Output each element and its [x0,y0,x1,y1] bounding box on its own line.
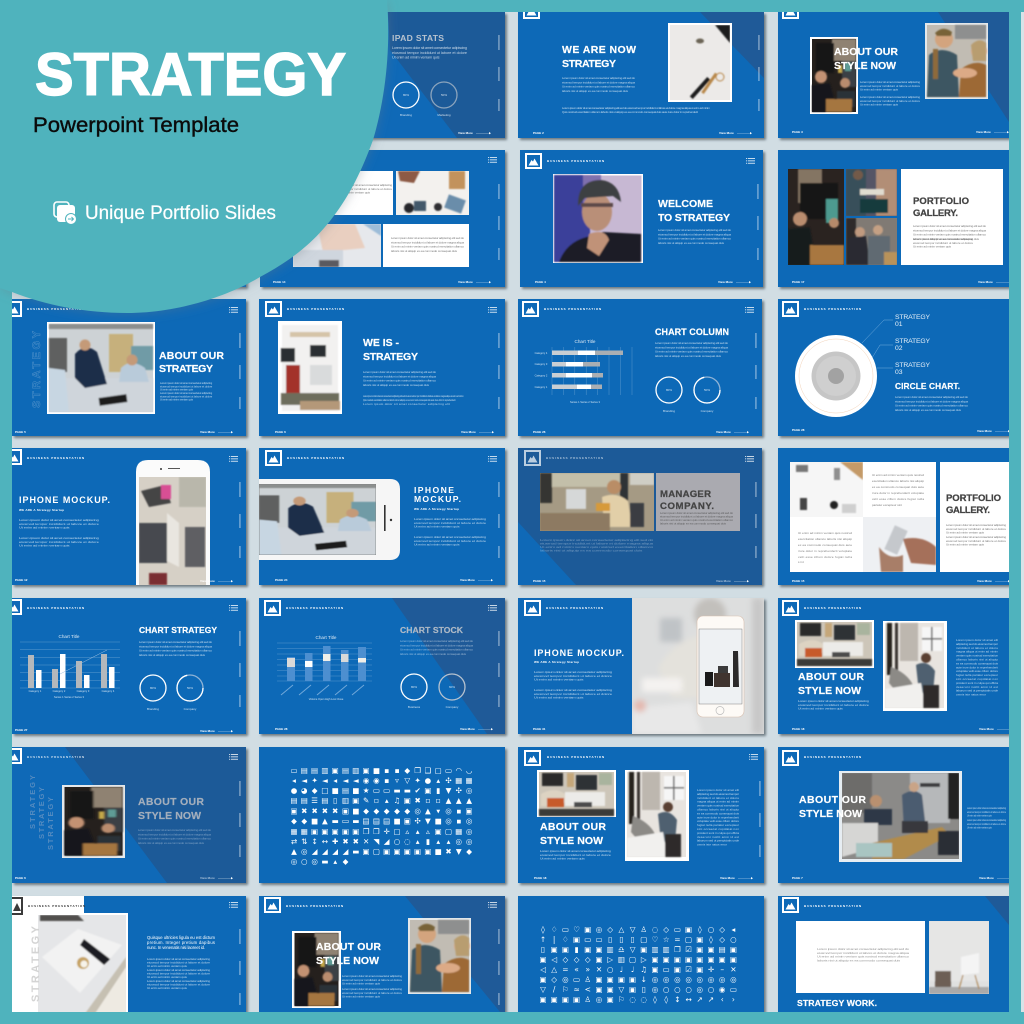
donut: stat two: 50% [441,93,447,97]
panel: portfolio gallery [901,169,1003,265]
photo: phones on table [790,462,863,517]
photo: presenter and team [839,771,962,862]
text card: Ut enim ad minim veniam quis nostrud [798,531,852,535]
icon grid: outline icons: ▽/⚐≈<▣▣▽▣▯◎○○○◎○◉▭ [540,985,737,994]
labels: strategy 01 to 03: STRATEGY [895,338,930,345]
heading: about our strategy: STRATEGY [159,363,213,375]
heading: about our style now [834,46,898,72]
text block: quote [147,935,216,950]
slide: welcome to strategy [520,150,763,287]
heading: about our style now [798,671,864,697]
heading: we are now strategy [562,44,636,70]
vertical words: strategy: STRATEGY [37,787,46,839]
icon grid: solid icons: ⇄⇅↕↔✚✖✖✕◥◢○◌▴▮▴▴◎◎ [291,837,472,846]
slide: chart column: View More [716,430,731,434]
heading: we are now strategy: WE ARE NOW [562,44,636,56]
slide: iPhone mockup, landscape: PAGE 24 [275,578,288,582]
labels: strategy 01 to 03 [895,314,930,376]
slide: chart stock: View More [460,727,475,731]
heading: we is strategy [363,337,418,363]
slide: welcome to strategy: BUSINESS PRESENTATION [547,159,605,163]
photo: two colleagues [925,23,988,99]
donut: stat one [656,377,682,413]
slide: welcome to strategy: View More [718,280,733,284]
tagline: Unique Portfolio Slides [85,202,276,224]
slide: portfolio gallery, photo grid: View More [978,280,993,284]
bar chart: Category 4 [102,689,115,693]
donut: stat one [140,675,166,711]
slide: about our style now, dark [6,747,246,883]
heading: chart strategy: CHART STRATEGY [139,625,217,635]
donut: stat one: Business [408,705,421,709]
slide: we is strategy [259,299,505,436]
labels: strategy 01 to 03: 03 [895,369,903,376]
heading: about our strategy: ABOUT OUR [159,350,224,362]
slide: portfolio gallery, photo grid [778,150,1011,287]
slide: about our style now, desk photos lower [518,747,764,883]
photo: desk with scissors [668,23,732,102]
heading: iPhone mockup [414,485,461,504]
text block [342,974,402,999]
slide: solid icon set [259,747,505,883]
heading: we is strategy: WE IS - [363,337,400,349]
bar chart: Chart Title [59,634,80,639]
panel: white text card [796,921,925,993]
icon grid: outline icons: ▯▣▣▮▣▣▥♎▽▣▥▥❐☑▣▣▤▣ [541,945,737,954]
text block: WE ARE A Strategy Startup [534,660,579,664]
panel: portfolio gallery [940,462,1009,572]
text block [138,828,211,845]
labels: strategy 01 to 03: 01 [895,321,903,328]
phone mockup [697,616,744,717]
donut: stat two: 50% [187,686,193,690]
text block: quote: Quisque ultricies ligula eu est dictum [147,935,216,940]
slide: about our style now, top right [778,4,1009,138]
photo: desk [537,770,616,817]
bar chart: Category 3 [77,689,90,693]
panel: portfolio gallery: GALLERY. [913,208,958,219]
slide: chart strategy [6,598,246,734]
icon grid: solid icons: ▣✖✖✖✖▣■◆◆◆◆◆◎▲▾◎▪▣ [290,806,473,816]
bar chart: Category 2 [535,374,548,378]
text block: quote: pretium. Integer pretium dapibus [147,940,215,945]
text card: ex ea commodo consequat duis aute [798,543,852,547]
heading: about our strategy [159,350,224,375]
icon grid: solid icons [290,766,473,866]
heading: about our style now: STYLE NOW [834,60,896,72]
slide: iPhone mockup, landscape [259,448,505,585]
icon grid: solid icons: ▭▤▤▥▣▤▥▣■▪▪◆❐❑▢▭◠◡ [290,766,472,775]
photo: man reading at desk [540,473,654,531]
slide: manager company: PAGE 15 [533,579,546,583]
text block [860,80,920,107]
heading: about our style now [316,941,381,967]
heading: about our style now: STYLE NOW [798,685,861,697]
panel: manager company: COMPANY. [660,501,714,512]
text column [956,638,998,697]
panel: manager company: MANAGER [660,489,711,500]
slide: circle chart: PAGE 28 [792,428,805,432]
donut: stat two: Company [184,707,197,711]
slide: chart strategy: PAGE 27 [15,728,28,732]
text card: Ut enim ad minim veniam quis nostrud [872,473,924,477]
heading: welcome to strategy [658,198,730,224]
slide: photo and text cards: PAGE 14 [273,280,286,284]
bar chart [535,339,632,404]
text block [160,381,213,402]
slide: about our style now, top right: PAGE 3 [792,130,803,134]
text column [697,788,740,847]
text card [383,224,469,267]
phone mockup [259,479,400,560]
slide: photo and text cards [260,150,505,287]
text block [895,395,968,412]
slide: circle chart [778,299,1010,436]
text block: quote: nunc. In venenatis nisi laoreet id. [147,945,205,950]
text block [540,539,654,552]
icon grid: outline icons [539,925,737,1004]
slide: chart column [518,299,762,436]
donut: stat two: 50% [704,388,710,392]
photo: woman by window [883,621,947,711]
slide: iPhone mockup, portrait: BUSINESS PRESENTATION [27,456,85,460]
heading: strategy work: STRATEGY WORK. [797,998,877,1008]
vertical word: strategy: STRATEGY [31,330,43,408]
text card: irure dolor in reprehenderit voluptate [798,549,852,553]
slide: outline icon set [518,896,764,1024]
photo: two colleagues [408,918,471,994]
slide: portfolio gallery, card grid: PAGE 15 [792,579,805,583]
icon: stacked slides [54,202,76,224]
text block: WE ARE A Strategy Startup [414,507,459,511]
photo: woman by window [625,770,689,861]
heading: about our style now: STYLE NOW [138,810,201,822]
donut: stat two [439,674,465,709]
slide: we is strategy: BUSINESS PRESENTATION [287,307,345,311]
donut: stat one: 80% [403,93,409,97]
heading: about our style now: ABOUT OUR [316,941,381,953]
slide: chart stock [259,598,505,734]
text card: pariatur excepteur sint [872,503,902,507]
slide: iPad stats: View More [458,131,473,135]
vertical words: strategy: STRATEGY [46,797,55,850]
subtitle: Powerpoint Template [33,113,239,137]
text card: velit esse cillum dolore fugiat nulla [872,497,924,501]
slide: manager company: View More [716,579,731,583]
slide: iPad stats [260,12,505,138]
badge: teal circle with title [0,0,388,313]
heading: about our style now: STYLE NOW [799,808,862,820]
slide: about our style now, team photo: BUSINESS PRESENTATION [804,755,862,759]
heading: about our style now [799,794,866,820]
text block [798,699,869,711]
slide: iPhone mockup, portrait: PAGE 12 [15,578,28,582]
donut: stat two: 60% [449,685,455,689]
slide: portfolio gallery, card grid: View More [977,579,992,583]
text card [863,462,936,517]
photo: chairs [929,921,989,994]
slide: chart strategy: View More [200,729,215,733]
slide: chart column: BUSINESS PRESENTATION [544,307,602,311]
text block [967,807,1006,830]
vertical word: strategy: STRATEGY [30,925,42,1002]
photo: portrait of a man [553,174,643,263]
heading: about our style now [138,796,204,822]
heading: circle chart: CIRCLE CHART. [895,381,960,391]
donut: stat one: Branding [400,113,412,117]
heading: chart column: CHART COLUMN [655,327,729,337]
donut: stat two [431,82,457,117]
text block [147,957,210,990]
slide: circle chart: BUSINESS PRESENTATION [804,307,862,311]
photo: office team [62,785,125,858]
bar chart: Series 1 Series 2 Series 3 [54,695,85,699]
icon grid: outline icons: ↑|♢▣▭▭▯▯▯▢♡☆=▢▣◊◇○ [540,935,737,944]
text block [534,660,612,699]
slide: about our strategy: BUSINESS PRESENTATION [27,307,85,311]
heading: about our style now: ABOUT OUR [798,671,864,683]
slide: about our style now, desk photos: View More [979,727,994,731]
text block: WE ARE A Strategy Startup [19,508,64,512]
title: STRATEGY [35,41,346,108]
bar chart: Category 1 [29,689,42,693]
panel: portfolio gallery: PORTFOLIO [946,493,1001,504]
photo: top view table [396,171,469,215]
panel: portfolio gallery: PORTFOLIO [913,196,969,207]
slide: white strategy panel with watch photo: BUSINESS PRESENTATION [28,904,86,908]
icon grid: solid icons: ◎○◎▬▴◆ [291,857,349,866]
slide: chart column: PAGE 26 [533,430,546,434]
icon grid: outline icons: ▣▣▣▣♙◎▣⚐◌◌◊◊↕↔↗↗‹› [539,995,735,1004]
slide: about our strategy [6,299,246,436]
panel: portfolio gallery: GALLERY. [946,505,990,516]
text card: irure dolor in reprehenderit voluptate [872,491,924,495]
slide: circle chart: View More [977,429,992,433]
donut: stat one: Branding [663,409,675,413]
heading: about our style now [540,821,606,847]
slide: about our style now, desk photos lower: BUSINESS PRESENTATION [547,755,605,759]
slide: we are now strategy [518,4,764,138]
stock chart: Volume Open High Low Close [309,697,344,701]
icon grid: solid icons: ▦▦▣▣▣▣▣❐❒✛▢▵▴▵▣▢▦◎ [290,827,472,836]
vertical words: strategy [28,775,55,850]
text block [363,370,464,406]
text block: iPad stats [392,46,467,60]
slide: we are now strategy: PAGE 2 [533,131,544,135]
bar chart: Category 4 [535,351,548,355]
heading: about our style now: ABOUT OUR [138,796,204,808]
text card: sint [798,560,804,564]
text card: exercitation ullamco laboris nisi aliquip [798,537,852,541]
slide: chart strategy: BUSINESS PRESENTATION [27,606,85,610]
bar chart: Category 3 [535,362,548,366]
photo grid [788,169,897,265]
slide: iPhone mockup, half photo: PAGE 31 [533,727,546,731]
donut: stat one: 80% [411,685,417,689]
heading: iPhone mockup: IPHONE MOCKUP. [19,495,110,505]
icon grid: solid icons: ◆◆■▲▬▭▬▤▤▤■▣✣▼■◎▪◎ [291,816,472,826]
slide: iPhone mockup, landscape: BUSINESS PRESENTATION [287,456,345,460]
slide: welcome to strategy: PAGE 4 [535,280,546,284]
icon grid: outline icons: ◊♢▭♡▣◎◇△▽♙◌◇▭▣◊○◇◂ [541,925,736,934]
bar chart [20,634,120,699]
heading: welcome to strategy: WELCOME [658,198,713,210]
photo: meeting [47,322,155,414]
slide: about our style now, team photo: View More [979,876,994,880]
slide: hidden behind badge [12,150,246,287]
phone mockup [136,460,210,585]
donut: stat one: Branding [147,707,159,711]
heading: chart stock: CHART STOCK [400,625,464,635]
donut: stat one [401,674,427,709]
slide: about our style now, bottom: BUSINESS PRESENTATION [286,904,344,908]
slide: about our style now, dark: BUSINESS PRESENTATION [27,755,85,759]
slide: about our style now, bottom [259,896,505,1024]
photo: laptop desk [293,224,381,267]
heading: about our style now: ABOUT OUR [834,46,898,58]
slide: about our style now, team photo: PAGE 7 [792,876,803,880]
donut: stat two [177,675,203,711]
slide: white strategy panel with watch photo [5,896,246,1024]
text card: exercitation ullamco laboris nisi aliquip [872,479,924,483]
slide: about our style now, desk photos: BUSINESS PRESENTATION [804,606,862,610]
slide: iPhone mockup, half photo: BUSINESS PRESENTATION [546,606,604,610]
donut: stat two: Marketing [437,113,451,117]
slide: strategy work [778,896,1009,1024]
slide: portfolio gallery, photo grid: PAGE 17 [792,280,805,284]
slide: about our style now, dark: PAGE 6 [15,876,26,880]
donut: stat two: Company [446,705,459,709]
stock chart [277,635,372,701]
photo: office team [292,931,341,1008]
text card: velit esse cillum dolore fugiat nulla [798,555,852,559]
panel: manager company [656,473,740,531]
bar chart: Series 1 Series 2 Series 3 [570,400,601,404]
slide: about our strategy: PAGE 5 [15,430,26,434]
icon grid: solid icons: ▲◎◢◢◢◢▬▣▢▣▣▣▣▣■✖▼◆ [291,847,472,856]
slide: we are now strategy: View More [719,131,734,135]
slide: photo and text cards: View More [458,280,473,284]
icon grid: solid icons: ▤▤☰▤▯▥▣✎▫▴♫▣✖▫▫▲▲▲ [290,796,472,805]
slide: iPhone mockup, portrait: View More [200,579,215,583]
donut: stat one: 80% [150,686,156,690]
text block [658,228,731,245]
heading: about our style now: STYLE NOW [316,955,379,967]
slide: about our style now, top right: View More [976,130,991,134]
slide: iPhone mockup, half photo [518,598,764,734]
slide: chart stock: PAGE 28 [275,727,288,731]
labels: strategy 01 to 03: STRATEGY [895,362,930,369]
slide: about our style now, desk photos lower: View More [720,876,735,880]
heading: about our style now: STYLE NOW [540,835,603,847]
donut: stat two: Company [701,409,714,413]
text block [139,640,212,657]
text card [320,171,393,215]
text block [19,508,99,547]
text card [790,517,863,572]
photo: hand holding phone [863,517,936,572]
slide: we is strategy: View More [461,430,476,434]
heading: about our style now: ABOUT OUR [799,794,866,806]
vertical words: strategy: STRATEGY [28,775,37,829]
icon grid: outline icons: ▣◁◇◇◇▣▷▥▢▷▣▣▣▣▣▣▣▣ [539,955,737,964]
icon grid: outline icons: ▣◇◎▭♙▣▣▣▣↓◎◎◎◎◎◎◎◎ [539,975,737,984]
slide: we is strategy: PAGE 6 [275,430,286,434]
labels: strategy 01 to 03: STRATEGY [895,314,930,321]
slide: iPhone mockup, portrait [6,448,246,585]
text block [400,639,473,656]
slide: about our style now, team photo [778,747,1012,883]
bar chart: Category 1 [535,385,548,389]
slide: about our style now, desk photos lower: PAGE 18 [534,876,547,880]
icon grid: solid icons: ●◕◆□■▤■★▭▭▬▬✔▣▮▼✣◎ [291,786,472,795]
donut: stat one: 80% [666,388,672,392]
photo: robot room [278,321,342,414]
photo: watch and keyboard [36,913,128,1018]
heading: iPhone mockup: IPHONE MOCKUP. [534,648,624,658]
heading: welcome to strategy: TO STRATEGY [658,212,730,224]
slide: about our strategy: View More [200,430,215,434]
text card: ex ea commodo consequat duis aute [872,485,924,489]
slide: iPhone mockup, landscape: View More [460,578,475,582]
slide: chart stock: BUSINESS PRESENTATION [286,606,344,610]
circle chart [795,320,893,417]
heading: iPhone mockup: IPHONE [414,485,454,495]
photo: office team [810,37,858,114]
heading: iPad stats: IPAD STATS [392,33,444,43]
slide: portfolio gallery, card grid [778,448,1010,585]
slide: about our style now, desk photos [778,598,1012,734]
labels: strategy 01 to 03: 02 [895,345,903,352]
photo: faded meeting background [632,598,764,734]
heading: about our style now: ABOUT OUR [540,821,606,833]
text block [655,341,728,358]
bar chart: Category 2 [53,689,66,693]
icon grid: outline icons: ◁△=«»✕○♩♩♫▣▭▣☑▣✛–✕ [540,965,737,974]
text block [414,507,486,547]
heading: we are now strategy: STRATEGY [562,58,616,70]
slide: manager company [518,448,762,585]
text block: Lorem ipsum dolor sit amet consectetur adipiscing elit [363,402,450,406]
text block [562,76,635,93]
donut: stat two [694,377,720,413]
heading: we is strategy: STRATEGY [363,351,418,363]
photo: desk [795,620,874,668]
icon grid: solid icons: ◂◄✦◄◂◄◄◉◉▪▿▽✦●▴✣▦▦ [292,776,473,785]
donut: stat one [393,82,419,117]
slide: strategy work: BUSINESS PRESENTATION [804,904,862,908]
slide: about our style now, desk photos: PAGE 18 [792,727,805,731]
stock chart: Chart Title [316,635,337,640]
slide: manager company: BUSINESS PRESENTATION [546,456,604,460]
text block [540,849,611,861]
heading: iPhone mockup: MOCKUP. [414,494,461,504]
slide: about our style now, dark: View More [200,876,215,880]
bar chart: Chart Title [575,339,596,344]
